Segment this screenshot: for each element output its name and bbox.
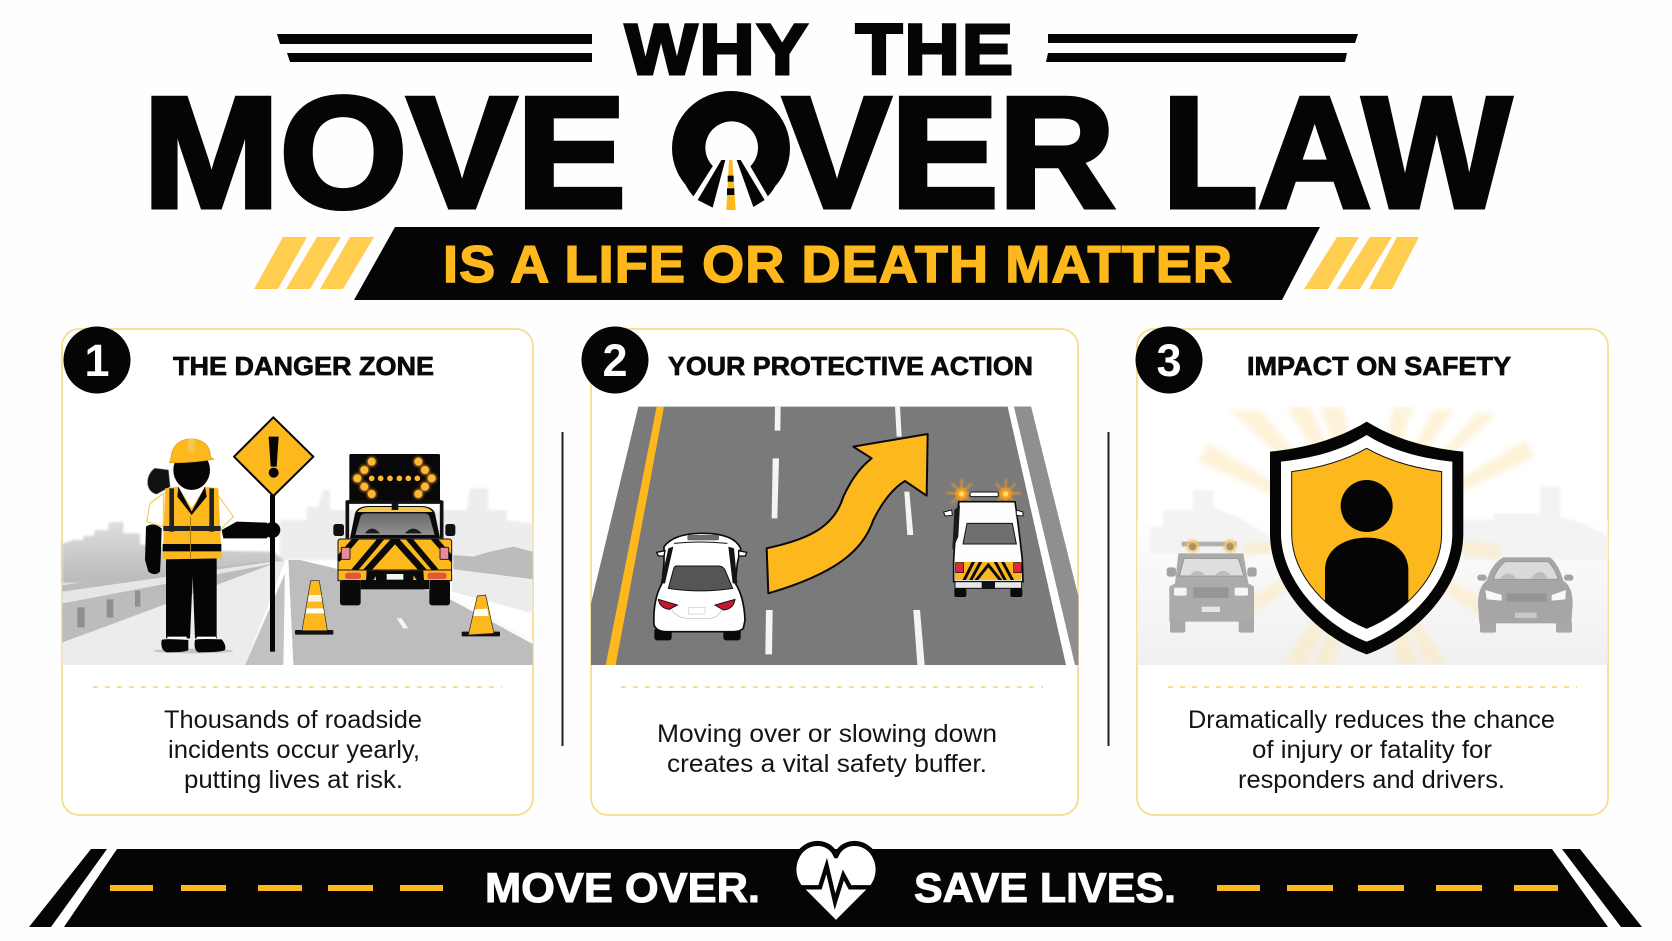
body text bbox=[1188, 706, 1555, 794]
warning sign bbox=[234, 417, 313, 652]
number badge 2 bbox=[582, 326, 648, 394]
truck with arrow board bbox=[333, 454, 455, 605]
heading: THE DANGER ZONE bbox=[173, 351, 434, 381]
divider right bbox=[1108, 432, 1110, 746]
title: move over law: VER bbox=[783, 65, 1115, 241]
illustration: road with lane change bbox=[591, 407, 1078, 665]
slogan left: MOVE OVER. bbox=[485, 864, 760, 911]
heading: YOUR PROTECTIVE ACTION bbox=[668, 351, 1033, 381]
cone 2 bbox=[462, 595, 500, 636]
decorative stripes right bbox=[1304, 237, 1419, 289]
title: move over law: MOVE bbox=[143, 65, 626, 241]
body text: incidents occur yearly, bbox=[168, 736, 420, 764]
illustration: worker and truck bbox=[62, 417, 533, 665]
icon: shield with person bbox=[1270, 422, 1463, 654]
safety rays bbox=[1198, 407, 1535, 665]
title: move over law: LAW bbox=[1162, 65, 1511, 241]
title: move over law: O bbox=[675, 65, 787, 241]
tow truck bbox=[944, 478, 1023, 597]
centre line dashes right bbox=[1217, 885, 1558, 891]
number badge 3 bbox=[1136, 326, 1202, 394]
divider left bbox=[562, 432, 564, 746]
number badge 1: 1 bbox=[84, 335, 110, 386]
number badge 3: 3 bbox=[1156, 335, 1182, 386]
body text: Thousands of roadside bbox=[164, 706, 422, 734]
title: why the: WHY THE bbox=[625, 11, 1015, 90]
centre line dashes left bbox=[110, 885, 443, 891]
worker bbox=[145, 439, 280, 653]
body text: of injury or fatality for bbox=[1252, 736, 1492, 764]
banner: is a life or death matter bbox=[354, 227, 1320, 300]
panel 2: your protective action bbox=[582, 326, 1078, 815]
footer road banner bbox=[29, 843, 1642, 927]
decorative stripes left bbox=[254, 237, 374, 289]
title rules right bbox=[1046, 34, 1358, 62]
panel 3: impact on safety bbox=[1136, 326, 1608, 815]
title rules left bbox=[277, 34, 592, 62]
body text: putting lives at risk. bbox=[184, 766, 403, 794]
icon: heart with pulse bbox=[793, 843, 880, 923]
heading: IMPACT ON SAFETY bbox=[1247, 351, 1511, 381]
banner: is a life or death matter: IS A LIFE OR DEATH MATTER bbox=[443, 236, 1233, 294]
body text bbox=[657, 720, 997, 778]
number badge 2: 2 bbox=[602, 335, 628, 386]
body text: Moving over or slowing down bbox=[657, 720, 997, 748]
panel 1: the danger zone bbox=[62, 326, 533, 815]
slogan right: SAVE LIVES. bbox=[914, 864, 1176, 911]
responder vehicle bbox=[1167, 539, 1257, 633]
hi-vis vest bbox=[163, 487, 222, 559]
icon: road inside the letter O bbox=[672, 91, 790, 213]
body text: responders and drivers. bbox=[1238, 766, 1505, 794]
body text: creates a vital safety buffer. bbox=[667, 750, 987, 778]
body text bbox=[164, 706, 422, 794]
illustration: shield and vehicles bbox=[1137, 407, 1608, 665]
body text: Dramatically reduces the chance bbox=[1188, 706, 1555, 734]
white car bbox=[654, 533, 747, 640]
pavement bbox=[62, 562, 285, 665]
passing car bbox=[1477, 557, 1573, 633]
cone 1 bbox=[295, 581, 333, 635]
arrow: move over bbox=[767, 434, 928, 593]
title: move over law bbox=[143, 65, 1511, 241]
number badge 1 bbox=[64, 326, 130, 394]
guardrail bbox=[62, 561, 270, 643]
distant skyline bbox=[280, 488, 533, 560]
